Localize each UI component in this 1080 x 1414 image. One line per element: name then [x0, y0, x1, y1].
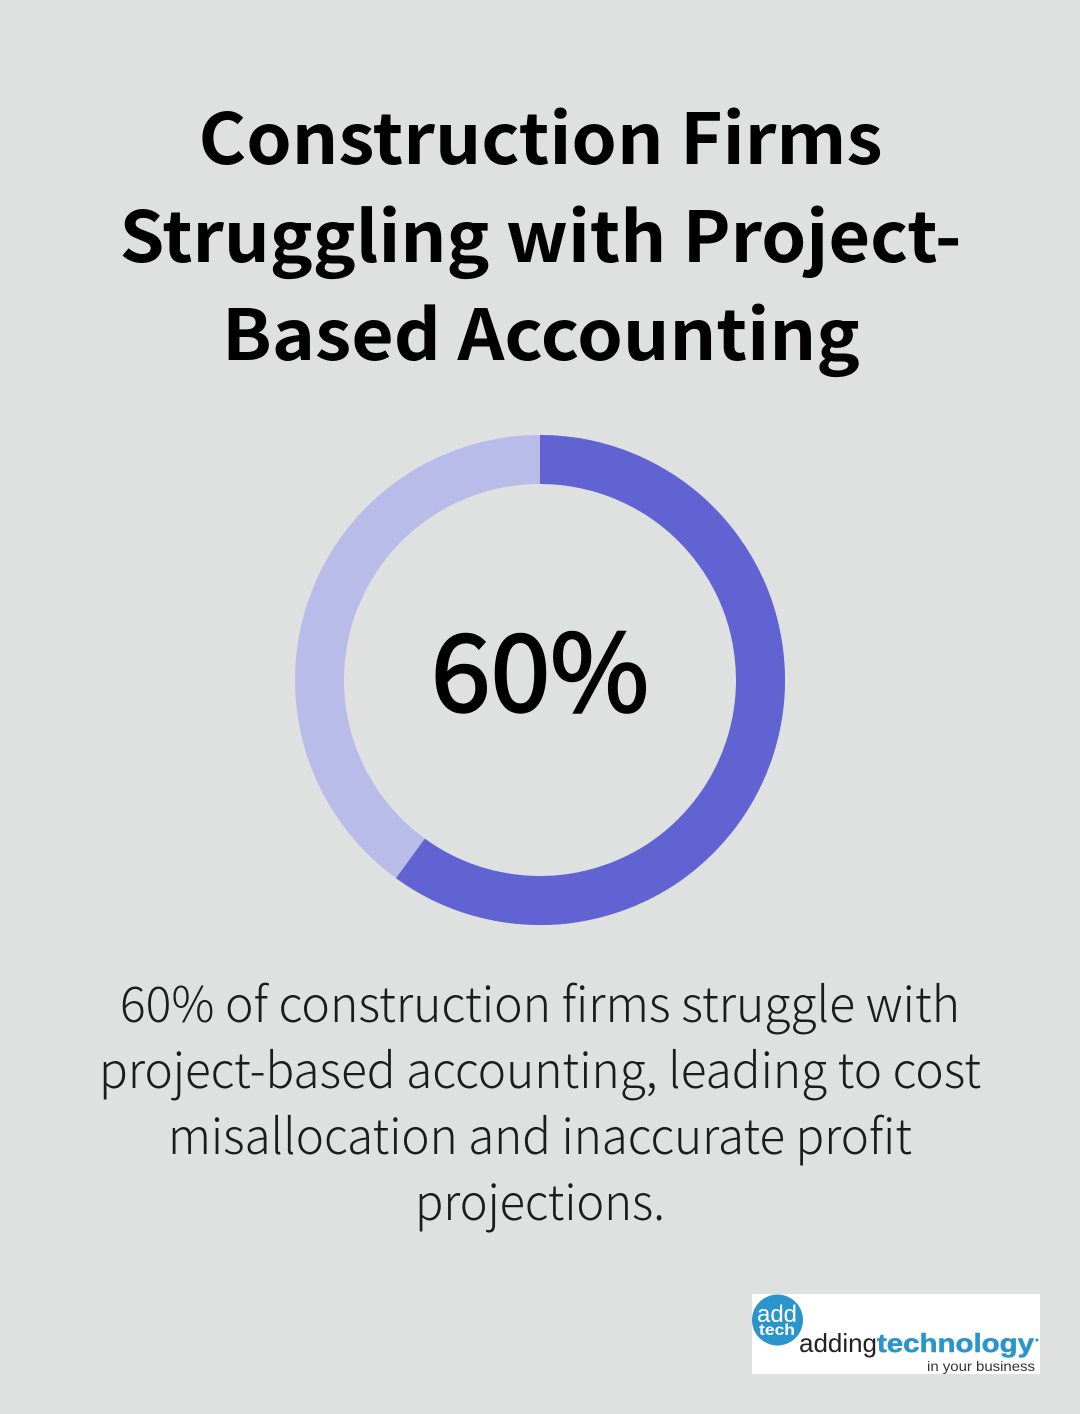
- logo wordmark: [799, 1328, 1038, 1358]
- title: Struggling with Project-: [120, 182, 962, 283]
- description text: project-based accounting, leading to cost: [99, 1032, 981, 1103]
- logo badge: tech: [759, 1322, 795, 1339]
- logo: adding technology: [752, 1294, 1040, 1374]
- description text: [99, 966, 981, 1235]
- chart value: 60%: [431, 588, 649, 742]
- description text: misallocation and inaccurate profit: [168, 1098, 912, 1169]
- title: Based Accounting: [222, 280, 860, 381]
- description text: 60% of construction firms struggle with: [120, 966, 960, 1037]
- logo background: [752, 1294, 1040, 1374]
- description text: projections.: [415, 1164, 665, 1235]
- logo tagline: in your business: [927, 1358, 1035, 1374]
- donut chart: 60 percent: [320, 460, 760, 900]
- logo wordmark: technology: [877, 1328, 1035, 1358]
- chart track: remaining 40 percent: [320, 460, 760, 900]
- title: Construction Firms: [198, 84, 883, 185]
- logo badge: [752, 1294, 803, 1346]
- logo wordmark: adding: [799, 1328, 877, 1358]
- chart segment: 60 percent: [410, 460, 760, 900]
- title: [120, 84, 962, 381]
- logo badge: add: [757, 1301, 797, 1328]
